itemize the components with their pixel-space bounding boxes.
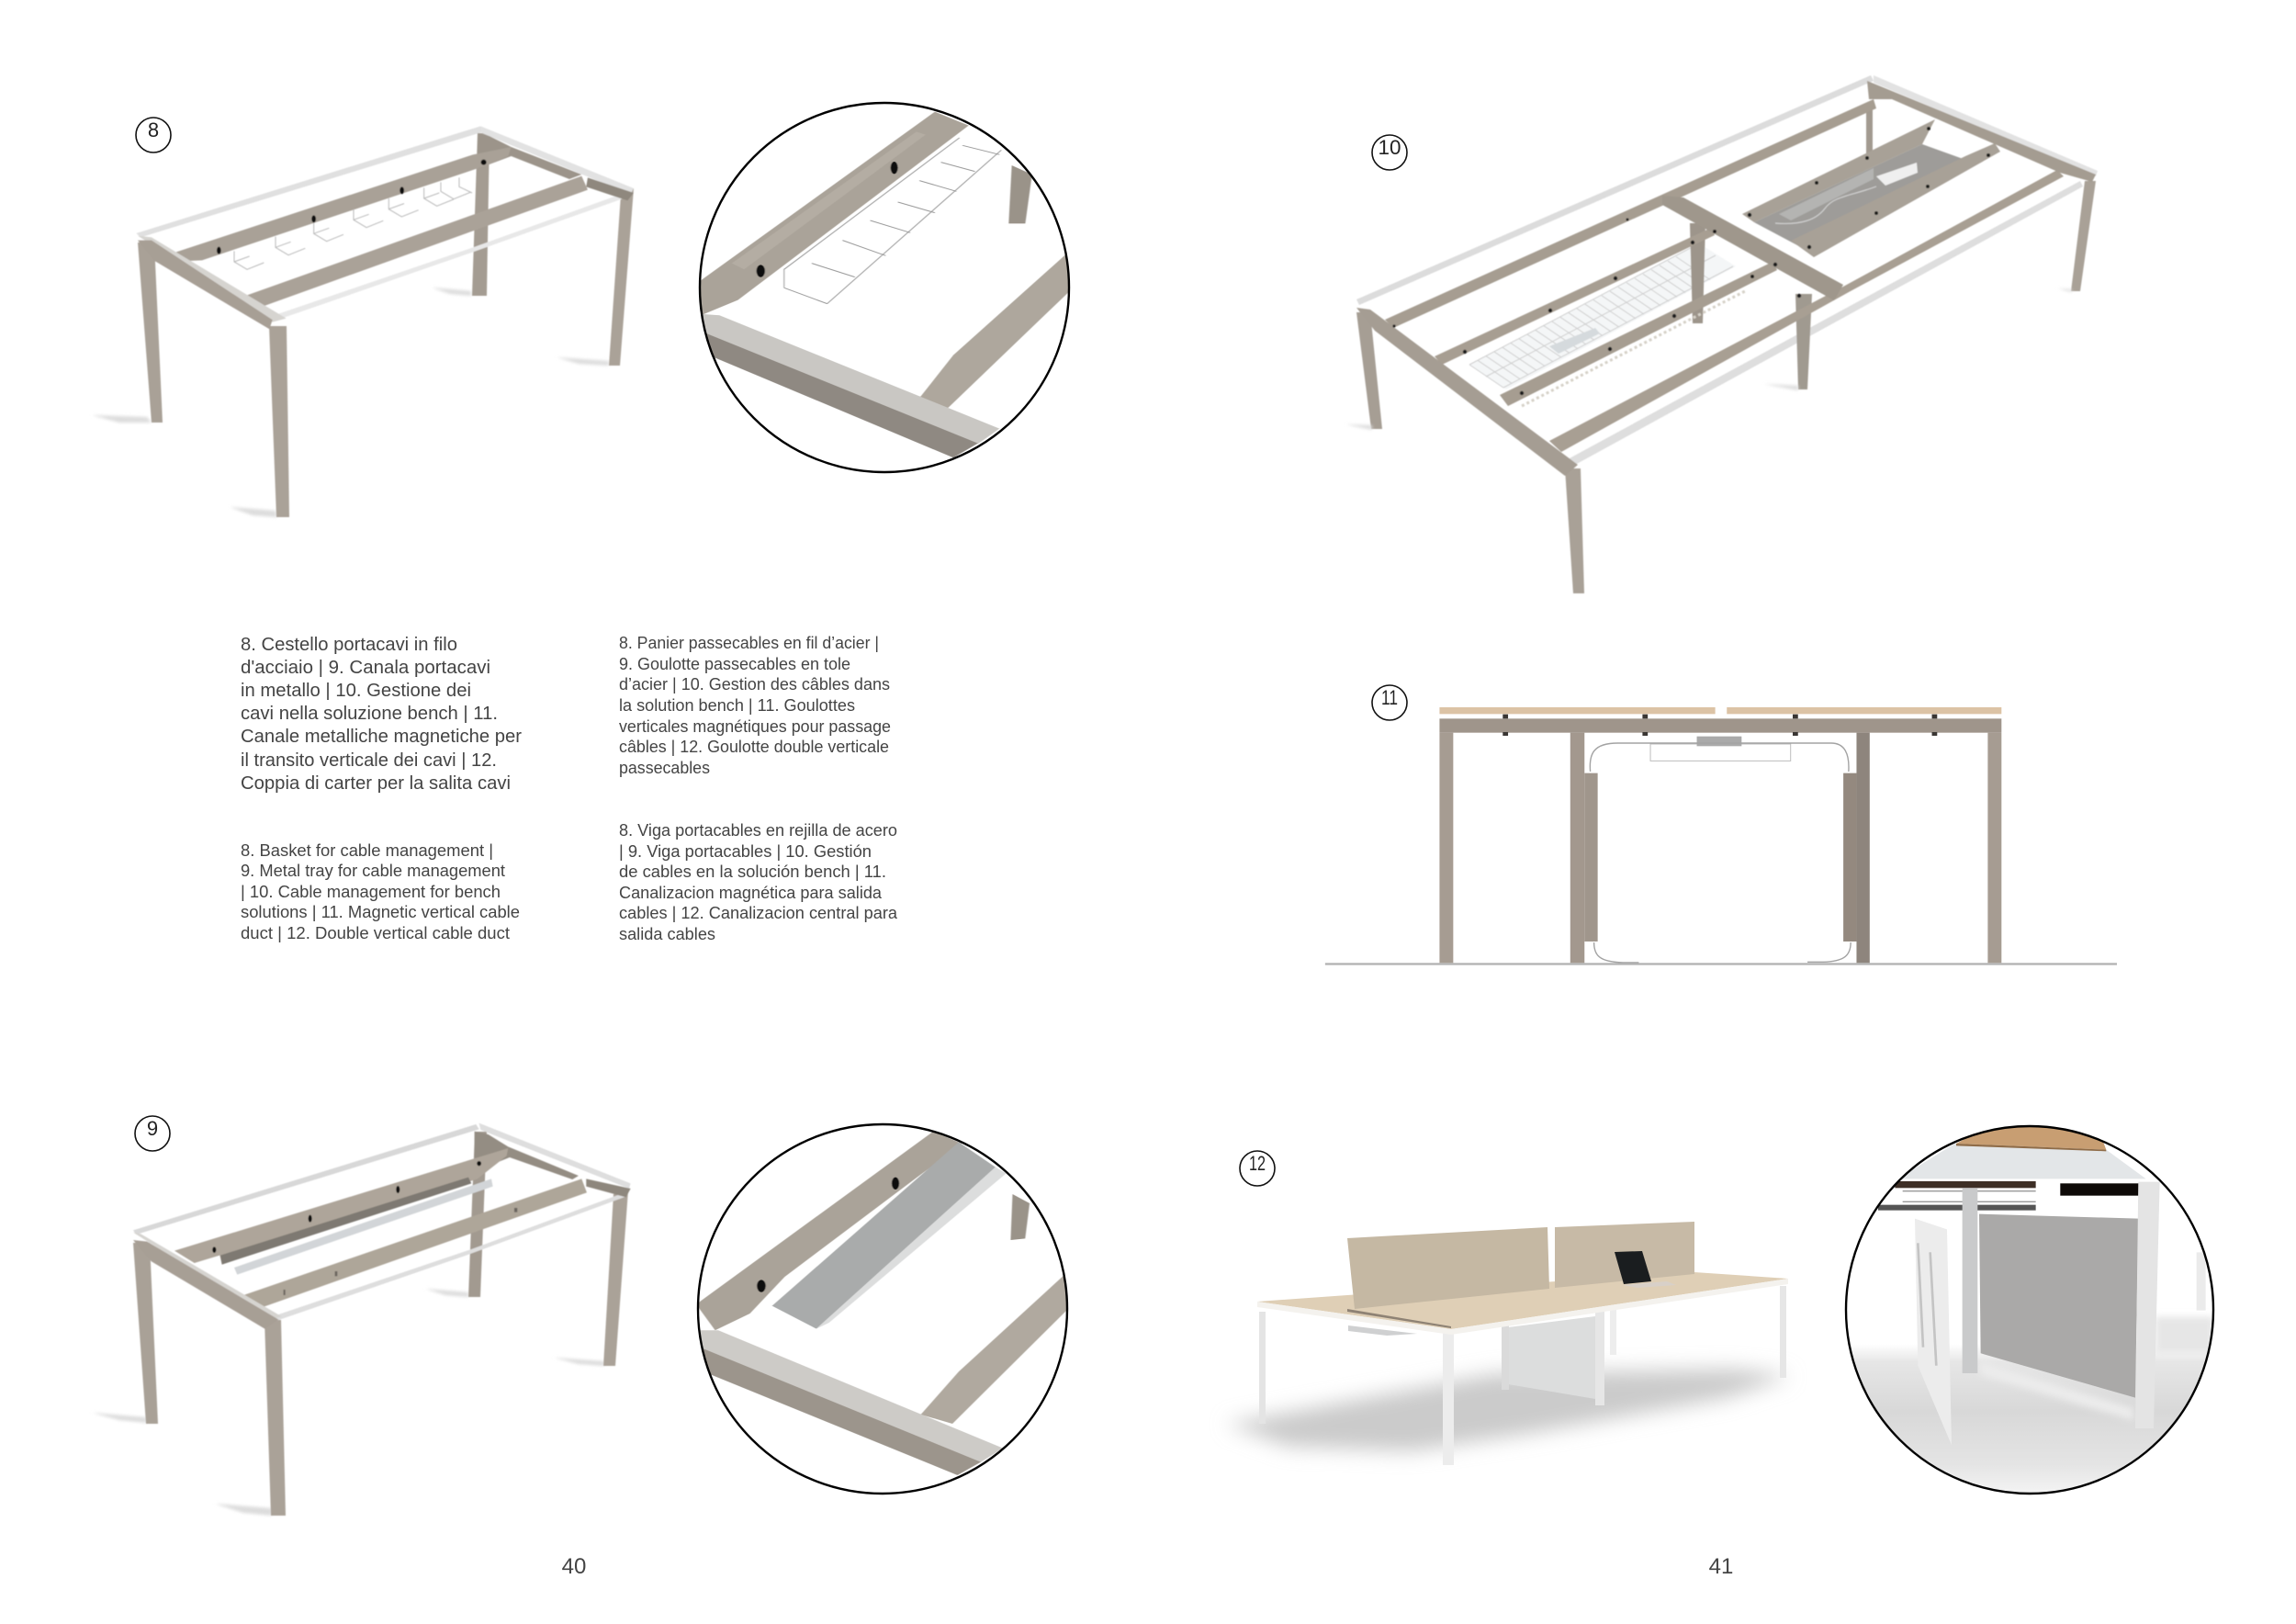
text block: Spanish description: Canalizacion magnética para salida (619, 884, 883, 902)
text block: Italian description: Coppia di carter per la salita cavi (241, 773, 511, 794)
detail circle: metal tray close-up (696, 1124, 1079, 1494)
label: number 12 (1240, 1151, 1275, 1186)
text block: Italian description: cavi nella soluzione bench | 11. (241, 704, 498, 724)
text block: Spanish description: cables | 12. Canalizacion central para (619, 904, 898, 922)
text block: English description: duct | 12. Double vertical cable duct (241, 924, 510, 942)
text block: Italian description: d'acciaio | 9. Canala portacavi (241, 658, 490, 678)
text block: Spanish description: salida cables (619, 925, 715, 943)
text block: English description (241, 841, 520, 942)
text block: Spanish description: 8. Viga portacables en rejilla de acero (619, 821, 897, 840)
panel: figure 12 (1226, 1125, 2213, 1494)
label: number 11 (1372, 685, 1407, 720)
text block: Italian description: in metallo | 10. Gestione dei (241, 681, 471, 701)
text block: Italian description: Canale metalliche magnetiche per (241, 727, 522, 747)
panel: figure 11 (1325, 685, 2117, 965)
label: number 10 (1372, 135, 1407, 170)
text block: English description: 9. Metal tray for cable management (241, 862, 505, 880)
detail circle: cable duct close-up (1846, 1125, 2213, 1494)
text block: French description: câbles | 12. Goulotte double verticale (619, 738, 889, 756)
illustration: table frame with metal tray (92, 1123, 631, 1516)
cable tray with power strip (1742, 119, 2000, 257)
label: number 9: 9 (147, 1117, 158, 1140)
page number 41: 41 (1709, 1554, 1733, 1579)
label: number 10: 10 (1378, 136, 1401, 159)
label: number 12: 12 (1249, 1152, 1266, 1175)
text block: English description: 8. Basket for cable management | (241, 841, 493, 860)
text block: French description: 9. Goulotte passecables en tole (619, 655, 850, 673)
wire basket (1469, 243, 1736, 389)
panel: figure 9 (92, 1116, 1079, 1516)
illustration: table frame with wire basket (92, 126, 634, 517)
text block: Italian description: 8. Cestello portacavi in filo (241, 635, 457, 655)
text block: Italian description: il transito verticale dei cavi | 12. (241, 750, 497, 771)
label: number 9 (135, 1116, 170, 1151)
text block: Spanish description: | 9. Viga portacables | 10. Gestión (619, 842, 872, 861)
text block: French description: verticales magnétiques pour passage (619, 717, 891, 736)
panel: figure 8 (92, 103, 1076, 517)
page number 40: 40 (562, 1554, 586, 1579)
text block: French description: 8. Panier passecables en fil d’acier | (619, 634, 879, 652)
illustration: bench desk with screens (1226, 1222, 1791, 1465)
label: number 8: 8 (148, 118, 159, 141)
text block: Spanish description (619, 821, 898, 943)
label: number 8 (136, 118, 171, 152)
illustration: bench front elevation (1325, 707, 2117, 965)
illustration: bench frame with basket and tray (1345, 75, 2098, 593)
label: number 11: 11 (1381, 686, 1398, 709)
text block: English description: | 10. Cable management for bench (241, 883, 501, 901)
detail circle: wire basket close-up (695, 103, 1076, 472)
text block: French description: la solution bench | 11. Goulottes (619, 696, 855, 715)
text block: Italian description (241, 635, 522, 794)
text block: English description: solutions | 11. Magnetic vertical cable (241, 903, 520, 921)
text block: Spanish description: de cables en la solución bench | 11. (619, 863, 886, 881)
text block: French description: passecables (619, 759, 710, 777)
text block: French description (619, 634, 891, 777)
panel: figure 10 (1345, 75, 2098, 593)
text block: French description: d’acier | 10. Gestion des câbles dans (619, 675, 890, 694)
